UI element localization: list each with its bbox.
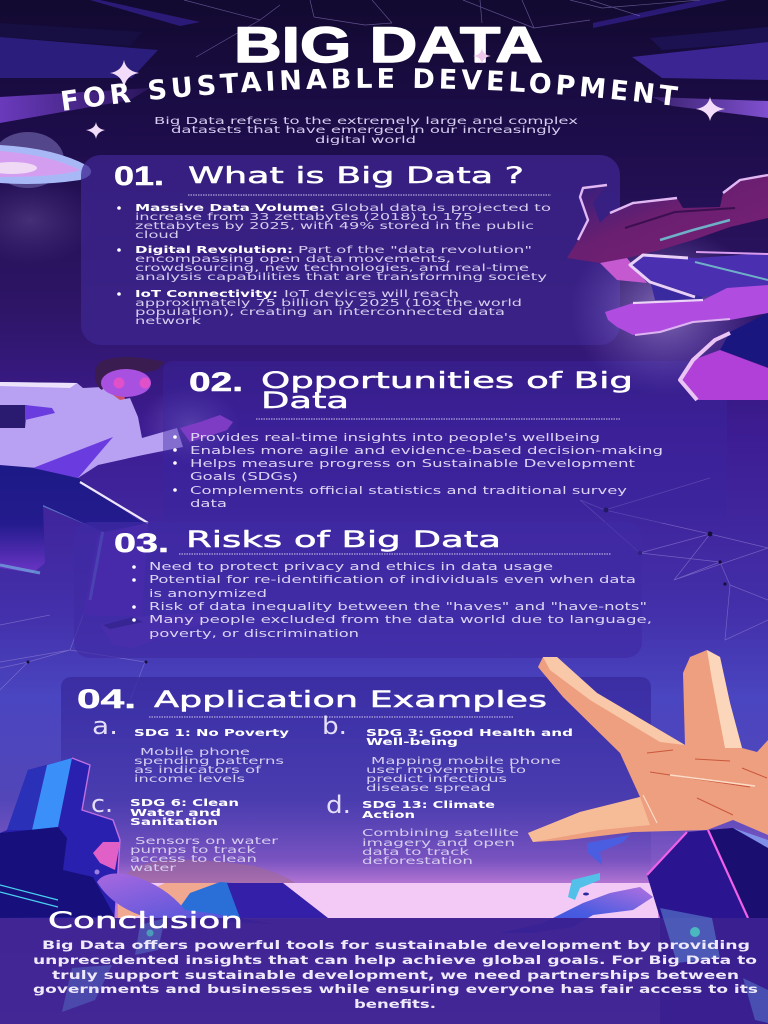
icon: UFO (0, 132, 100, 265)
conclusion text: benefits. (354, 997, 436, 1011)
illustration: floating woman (567, 175, 768, 400)
example a: no poverty: as indicators of (134, 765, 262, 776)
section 1 bullets: encompassing open data movements, (135, 254, 451, 265)
intro text: datasets that have emerged in our increasingly (171, 125, 561, 136)
arm and hand (605, 285, 768, 335)
back leg (43, 505, 148, 617)
section 3 heading: Risks of Big Data (186, 528, 501, 553)
section 1 heading: 01. (114, 161, 164, 191)
section 1 bullets: IoT Connectivity: (135, 289, 278, 300)
section 1 bullets: Digital Revolution: (135, 245, 293, 256)
example d: climate action: imagery and open (362, 838, 515, 849)
example b: good health: Well-being (366, 737, 458, 748)
shirt (0, 382, 183, 478)
section 3 bullets: Risk of data inequality between the "haves" and "have-nots" (149, 601, 647, 613)
illustration: reaching hand (528, 650, 768, 842)
section 4 heading: 04. (77, 684, 136, 714)
face (101, 369, 151, 397)
illustration: running man (0, 357, 240, 648)
hand (180, 415, 233, 442)
example a: no poverty: a. (92, 712, 118, 740)
section 1 heading (114, 161, 551, 195)
body (630, 253, 768, 297)
section 2 bullets: data (190, 498, 227, 510)
panel: opportunities (163, 361, 727, 523)
example a: no poverty: Mobile phone (140, 747, 250, 758)
example c: clean water: Sensors on water (135, 836, 279, 847)
intro text: Big Data refers to the extremely large and complex (154, 116, 578, 127)
conclusion text: unprecedented insights that can help achieve global goals. For Big Data to (33, 953, 757, 967)
leg (680, 350, 768, 400)
constellation lines (0, 0, 768, 700)
conclusion heading: Conclusion (48, 909, 243, 934)
subtitle: FOR SUSTAINABLE DEVELOPMENT (62, 68, 678, 111)
example a: no poverty (92, 712, 290, 785)
example c: clean water: water (130, 863, 177, 874)
section 3 bullets: is anonymized (149, 588, 267, 600)
illustration: right building (647, 828, 768, 1024)
section 2 heading: Data (261, 389, 349, 414)
example d: climate action: SDG 13: Climate (362, 800, 495, 811)
section 2 heading (189, 367, 633, 419)
section 3 bullets: Many people excluded from the data world due to language, (149, 614, 652, 626)
section 2 heading: Opportunities of Big (261, 369, 633, 394)
section 1 bullets: Massive Data Volume: (135, 203, 325, 214)
section 1 bullets: analysis capabilities that are transforming society (135, 272, 547, 283)
section 1 bullets: zettabytes by 2025, with 49% stored in the public (135, 221, 534, 232)
conclusion text (33, 938, 758, 1011)
example c: clean water: SDG 6: Clean (130, 798, 239, 809)
illustration: left fish (93, 842, 277, 925)
neck (103, 383, 125, 400)
example a: no poverty: SDG 1: No Poverty (134, 728, 290, 739)
illustration: tablets under conclusion (62, 908, 768, 1023)
example a: no poverty: spending patterns (134, 756, 284, 767)
shoe (100, 613, 203, 648)
panel: what is big data (81, 155, 620, 345)
example d: climate action: Combining satellite (362, 828, 519, 839)
section 4 heading: Application Examples (154, 688, 547, 713)
section 1 bullets: increase from 33 zettabytes (2018) to 175 (135, 212, 473, 223)
section 3 bullets: poverty, or discrimination (149, 628, 359, 640)
example c: clean water: Water and (130, 808, 221, 819)
top light rays (0, 0, 768, 123)
illustration: mountain (180, 882, 328, 918)
example d: climate action: Action (362, 810, 415, 821)
example c: clean water: Sanitation (130, 817, 218, 828)
section 2 bullets: Enables more agile and evidence-based decision-making (190, 445, 663, 457)
section 2 bullets: Complements official statistics and traditional survey (190, 485, 627, 497)
section 3 bullets: Potential for re-identification of individuals even when data (149, 574, 636, 586)
panel: risks (74, 522, 642, 658)
illustration: right fish (500, 835, 653, 933)
section 3 heading: 03. (114, 528, 169, 558)
section 1 bullets: crowdsourcing, new technologies, and real-time (135, 263, 529, 274)
hair (567, 175, 768, 263)
example b: good health: disease spread (366, 783, 491, 794)
section 4 heading (77, 684, 547, 717)
section 3 bullets (132, 561, 652, 640)
section 1 bullets: Global data is projected to (331, 203, 551, 214)
section 3 heading (114, 528, 611, 558)
icon: sparkle stars (86, 60, 725, 139)
example d: climate action: deforestation (362, 856, 473, 867)
section 1 bullets: IoT devices will reach (284, 289, 459, 300)
section 1 heading: What is Big Data ? (188, 164, 524, 189)
example c: clean water: pumps to track (130, 845, 256, 856)
example b: good health: Mapping mobile phone (371, 756, 561, 767)
example c: clean water: c. (91, 790, 113, 818)
example d: climate action (326, 791, 519, 867)
conclusion text: truly support sustainable development, we need partnerships between (52, 968, 739, 982)
section 1 bullets: approximately 75 billion by 2025 (10x the world (135, 298, 522, 309)
panel: conclusion (0, 918, 768, 1024)
section 2 bullets: Goals (SDGs) (190, 471, 298, 483)
illustration: peach ledge (118, 883, 230, 918)
example d: climate action: data to track (362, 847, 469, 858)
illustration: pink horizon (118, 883, 658, 919)
hair (95, 357, 165, 390)
section 2 heading: 02. (189, 367, 243, 397)
intro text: digital world (315, 135, 416, 146)
example b: good health: SDG 3: Good Health and (366, 728, 573, 739)
section 1 bullets: Part of the "data revolution" (298, 245, 532, 256)
section 2 bullets: Provides real-time insights into people's wellbeing (190, 432, 600, 444)
section 2 bullets: Helps measure progress on Sustainable Development (190, 458, 635, 470)
panel: application examples (61, 677, 651, 887)
skirt (720, 313, 768, 367)
example b: good health: user movements to (366, 765, 526, 776)
illustration: pink cloud (120, 860, 295, 883)
title: BIG DATA (234, 17, 543, 73)
section 1 bullets: network (135, 316, 201, 327)
section 2 bullets (173, 432, 663, 510)
face (600, 258, 647, 283)
section 1 bullets: cloud (135, 230, 179, 241)
intro text (154, 116, 578, 146)
example c: clean water: access to clean (130, 854, 257, 865)
illustration: left building (0, 758, 120, 918)
conclusion text: Big Data offers powerful tools for sustainable development by providing (42, 938, 750, 952)
constellation nodes (26, 508, 727, 664)
example c: clean water (91, 790, 279, 874)
conclusion text: governments and businesses while ensuring everyone has fair access to its (33, 982, 758, 996)
example b: good health: predict infectious (366, 774, 507, 785)
example b: good health: b. (322, 712, 347, 740)
example a: no poverty: income levels (134, 774, 245, 785)
example d: climate action: d. (326, 791, 351, 819)
section 1 bullets: population), creating an interconnected data (135, 307, 505, 318)
section 3 bullets: Need to protect privacy and ethics in data usage (149, 561, 553, 573)
front leg (0, 465, 148, 573)
example b: good health (322, 712, 573, 794)
section 1 bullets (117, 203, 551, 327)
